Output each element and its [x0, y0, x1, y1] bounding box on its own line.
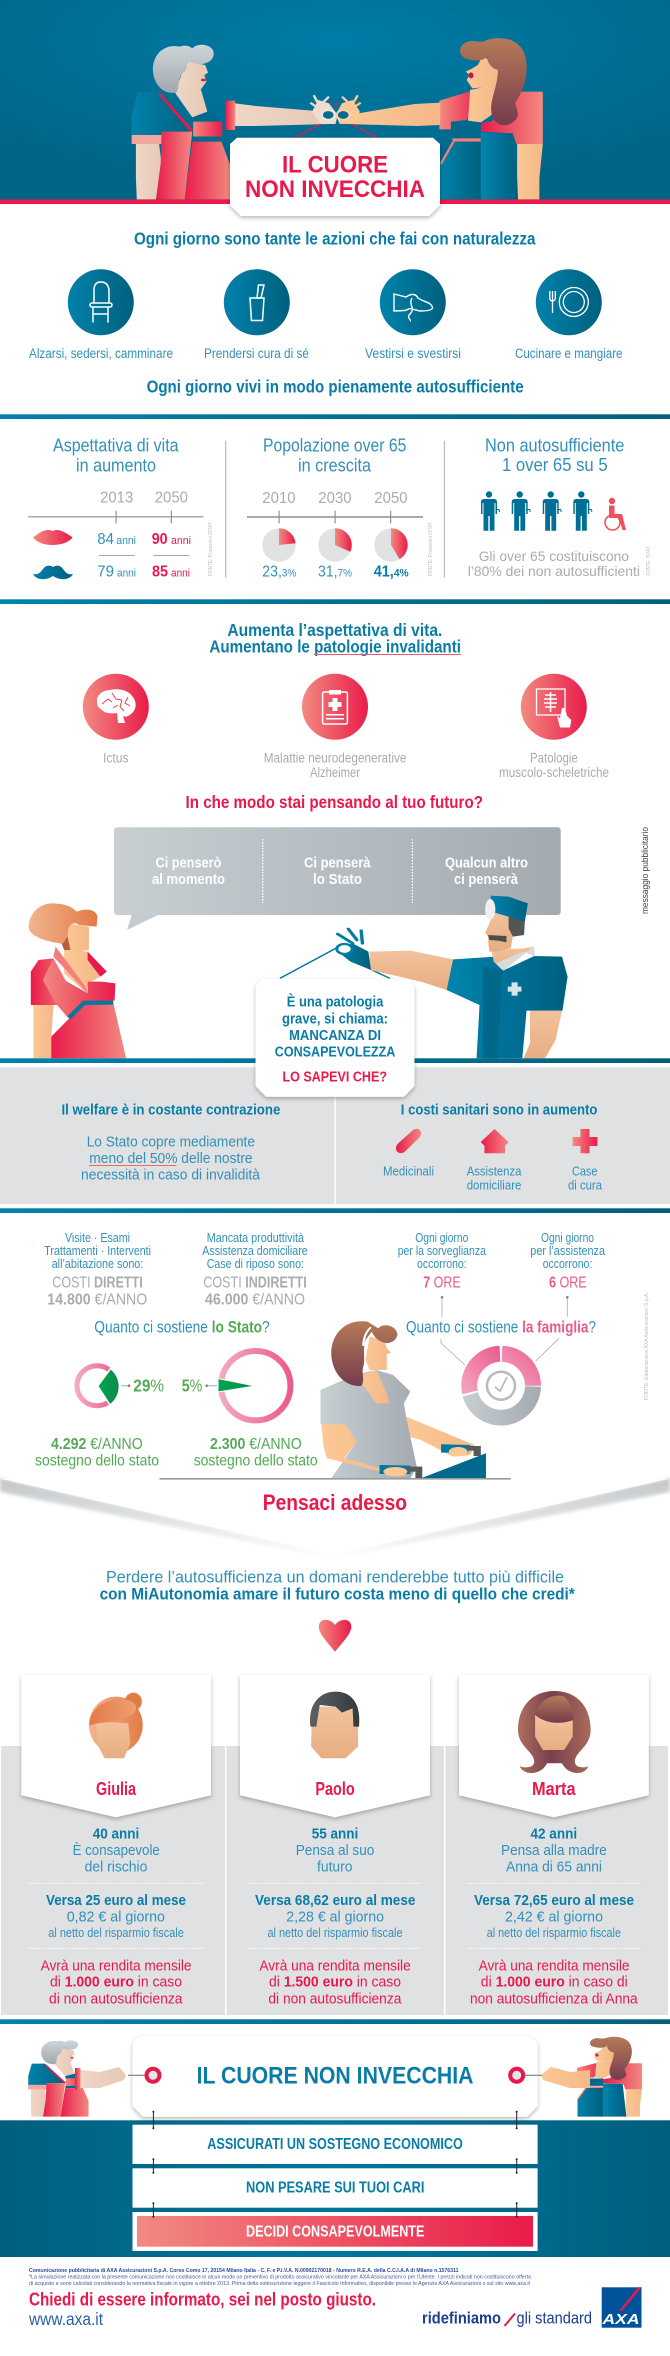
heading: how are you thinking about your future: In che modo stai pensando al tuo futuro?	[186, 792, 483, 812]
slogan	[422, 2308, 592, 2327]
disease labels: muscolo-scheletriche	[499, 765, 609, 780]
chart: state support 5 percent: 5%	[182, 1376, 202, 1396]
panel: Paolo: Versa 68,62 euro al mese	[255, 1892, 415, 1909]
panel: non self sufficient: l’80% dei non autosufficienti	[468, 563, 640, 579]
red line under hero	[0, 200, 670, 204]
hero illustration: two women tying a knot	[132, 38, 543, 199]
disease labels: Patologie	[530, 751, 578, 766]
disease labels: Alzheimer	[310, 765, 360, 780]
slogan: gli standard	[516, 2308, 592, 2327]
illustration: thinking woman	[29, 903, 126, 1058]
source note: FONTE: Elaborazione AXA Assicurazioni S.p.A.	[644, 1292, 650, 1400]
legal fine print: di acquisto e sono calcolati considerando la normativa fiscale in vigore a ottobre 2013. Prima della sottoscrizione leggere il Fascicolo Informativo, disponibile presso le Agenzie AXA Assicurazioni o sul sito www.axa.it	[29, 2281, 531, 2287]
icon: person 3	[543, 491, 562, 531]
arrow banner	[0, 1478, 670, 1554]
disease icons	[83, 674, 609, 780]
panel: hours of care: Ogni giorno	[541, 1231, 594, 1245]
website: www.axa.it	[28, 2309, 103, 2329]
pie chart 2010	[262, 528, 296, 562]
panel: Giulia: di 1.000 euro in caso	[50, 1974, 182, 1991]
card: lack of awareness: CONSAPEVOLEZZA	[275, 1045, 396, 1061]
message box: decide consciously: DECIDI CONSAPEVOLMENTE	[246, 2223, 424, 2240]
panel: non self sufficient	[468, 434, 652, 579]
icon: brain	[83, 674, 149, 740]
speech bubble: lo Stato	[313, 872, 362, 888]
panel: Marta: 2,42 € al giorno	[505, 1909, 603, 1926]
panel: Paolo: al netto del risparmio fiscale	[268, 1926, 403, 1940]
panel: rising health costs	[383, 1101, 603, 1192]
title card: IL CUORE	[282, 151, 388, 178]
illustration: nurse at work	[321, 1321, 486, 1478]
legal fine print: *La simulazione realizzata con la presente comunicazione non costituisce in alcun modo un preventivo di prodotto assicurativo vincolante per AXA Assicurazioni o per l’Utente. I prezzi indicati non costituiscono offerta	[29, 2275, 531, 2281]
panel: non self sufficient: Non autosufficiente	[485, 434, 624, 455]
panel: life expectancy: in aumento	[76, 454, 156, 475]
speech bubble: Qualcun altro	[445, 855, 528, 871]
hero: background	[0, 0, 670, 200]
panel: rising health costs: domiciliare	[467, 1177, 521, 1192]
title card	[230, 138, 440, 216]
gray column backgrounds	[1, 1746, 668, 2015]
heading: state support: Quanto ci sostiene lo Stato?	[94, 1319, 270, 1337]
panel: Paolo: Pensa al suo	[296, 1842, 374, 1859]
panel: Paolo	[240, 1675, 430, 2007]
panel: non self sufficient: 1 over 65 su 5	[502, 454, 608, 475]
panel: Giulia: Giulia	[96, 1778, 137, 1799]
panel: life expectancy: anni	[171, 535, 191, 547]
panel: non self sufficient: Gli over 65 costituiscono	[479, 548, 629, 564]
AXA logo	[601, 2287, 642, 2328]
panel: Marta: Versa 72,65 euro al mese	[474, 1892, 634, 1909]
panel: Giulia: È consapevole	[73, 1842, 160, 1859]
panel: life expectancy: 2050	[155, 490, 188, 507]
message box: decide consciously	[132, 2212, 538, 2251]
blue divider	[0, 2019, 670, 2024]
icon: chair	[68, 269, 134, 335]
panel: population over 65: in crescita	[298, 454, 372, 475]
heading: think about it now: Pensaci adesso	[263, 1490, 407, 1515]
panel: direct and indirect costs: COSTI INDIRETTI	[203, 1275, 307, 1292]
ring right	[510, 2069, 542, 2082]
icon: wheelchair	[605, 498, 626, 530]
blue divider	[0, 1208, 670, 1213]
message box: do not burden your loved ones: NON PESARE SUI TUOI CARI	[246, 2180, 424, 2197]
panel: Giulia: al netto del risparmio fiscale	[48, 1926, 184, 1940]
panel: Paolo: 55 anni	[312, 1825, 358, 1842]
panel: Giulia: Avrà una rendita mensile	[41, 1957, 191, 1974]
panel: welfare contraction: Lo Stato copre mediamente	[87, 1135, 255, 1151]
legal fine print: Comunicazione pubblicitaria di AXA Assicurazioni S.p.A. Corso Como 17, 20154 Milano Italia - C. F. e P.I.V.A. N.00902170018 - Numero R.E.A. della C.C.I.A.A di Milano n.1576311	[29, 2268, 458, 2274]
panel: rising health costs: di cura	[568, 1177, 603, 1192]
daily action icons row	[29, 269, 622, 361]
panel: population over 65: 23,3%	[262, 564, 296, 581]
older woman body	[132, 45, 231, 199]
AXA logo: AXA	[601, 2311, 640, 2328]
intro text: MiAutonomia	[100, 1569, 575, 1603]
panel: rising health costs: I costi sanitari sono in aumento	[401, 1101, 597, 1118]
panel: Giulia	[21, 1675, 211, 2007]
panel: Marta	[459, 1675, 649, 2007]
message box: economic support: ASSICURATI UN SOSTEGNO ECONOMICO	[207, 2136, 463, 2153]
heading: disabling diseases	[209, 620, 461, 656]
panel: direct and indirect costs: Trattamenti · Interventi	[44, 1244, 151, 1258]
panel: direct and indirect costs: Assistenza domiciliare	[202, 1244, 308, 1258]
panel: welfare contraction: Il welfare è in costante contrazione	[62, 1101, 280, 1118]
pie chart 2030	[318, 528, 352, 562]
panel: rising health costs: Assistenza	[467, 1163, 522, 1178]
panel: rising health costs: Case	[572, 1163, 597, 1178]
panel: life expectancy: anni	[117, 568, 136, 580]
speech bubble: al momento	[152, 872, 225, 888]
panel: Marta: di 1.000 euro in caso di	[481, 1974, 628, 1991]
intro text: MiAutonomia: Perdere l’autosufficienza un domani renderebbe tutto più difficile	[106, 1569, 564, 1587]
panel: population over 65: 31,7%	[318, 564, 352, 581]
closing title card	[128, 2036, 542, 2117]
closing title card: IL CUORE NON INVECCHIA	[197, 2063, 474, 2090]
panel: life expectancy: anni	[171, 568, 190, 580]
disease labels: Ictus	[103, 751, 129, 766]
panel: population over 65: FONTE: Proiezioni ISTAT	[428, 522, 434, 576]
panel: welfare contraction	[62, 1101, 280, 1183]
disease labels	[103, 751, 609, 780]
panel: population over 65: 2030	[318, 490, 352, 507]
panel: life expectancy: 2013	[100, 490, 133, 507]
blue floor line	[0, 1058, 670, 1063]
chart: state support 5 percent	[182, 1351, 290, 1420]
call to action: Chiedi di essere informato, sei nel posto giusto.	[29, 2290, 376, 2310]
card: lack of awareness: È una patologia	[287, 994, 384, 1011]
panel: hours of care: occorrono:	[417, 1257, 467, 1271]
title card: NON INVECCHIA	[245, 176, 425, 203]
panel: Giulia: 40 anni	[93, 1825, 139, 1842]
panel: Marta: al netto del risparmio fiscale	[487, 1926, 621, 1940]
panel: Paolo: 2,28 € al giorno	[286, 1909, 384, 1926]
panel: Marta: 42 anni	[530, 1825, 577, 1842]
chart: family care donut with clock	[461, 1346, 541, 1426]
closing illustration: older woman	[28, 2040, 126, 2117]
vertical label: messaggio pubblicitario	[640, 827, 651, 914]
icon: person 2	[512, 491, 531, 531]
younger woman outstretched arm	[346, 103, 440, 126]
table line	[159, 1478, 511, 1480]
connectors between boxes	[152, 2111, 518, 2218]
message box: do not burden your loved ones	[132, 2168, 538, 2208]
panel: Giulia: di non autosufficienza	[49, 1990, 183, 2007]
icon: house	[481, 1129, 508, 1153]
icon: person 4	[573, 491, 592, 531]
panel: direct and indirect costs: Visite · Esami	[65, 1231, 130, 1245]
panel: direct and indirect costs: Mancata produttività	[207, 1231, 304, 1245]
panel: Giulia: 0,82 € al giorno	[67, 1909, 165, 1926]
legal fine print	[29, 2268, 531, 2287]
panel: life expectancy: 84	[97, 531, 114, 548]
state support amounts: sostegno dello stato	[35, 1453, 159, 1470]
panel: life expectancy: FONTE: Proiezioni ISTAT	[208, 522, 214, 576]
panel: population over 65	[247, 435, 434, 581]
arrow banner shadow	[0, 1478, 670, 1559]
panel: hours of care: per la sorveglianza	[398, 1244, 486, 1258]
icon: clipboard	[302, 674, 368, 740]
icon: cross	[573, 1129, 597, 1153]
action labels: Alzarsi, sedersi, camminare	[29, 346, 173, 361]
chart: state support 29 percent: 29%	[133, 1376, 164, 1396]
icon: lips	[33, 530, 73, 545]
state support amounts: 4.292 €/ANNO	[51, 1436, 143, 1453]
panel: direct and indirect costs: all’abitazione sono:	[52, 1257, 143, 1271]
gray band	[0, 1067, 670, 1204]
teal band	[0, 2120, 670, 2257]
icon: shoe	[380, 269, 446, 335]
icon: clock	[487, 1372, 515, 1400]
heading: fully self sufficient: Ogni giorno vivi in modo pienamente autosufficiente	[147, 377, 524, 397]
panel: Marta: Avrà una rendita mensile	[479, 1957, 630, 1974]
panel: welfare contraction: meno del 50% delle nostre	[89, 1151, 253, 1167]
state support amounts: 2.300 €/ANNO	[210, 1436, 302, 1453]
panel: Marta: Anna di 65 anni	[506, 1859, 602, 1876]
chart: state support 29 percent	[77, 1366, 164, 1406]
panel: life expectancy: Aspettativa di vita	[53, 435, 179, 456]
panel: population over 65: 2050	[374, 490, 408, 507]
panel: life expectancy: 90	[152, 531, 168, 548]
panel: population over 65: Popolazione over 65	[263, 435, 406, 456]
panel: non self sufficient: FONTE: ISTAT	[646, 546, 652, 576]
heading: disabling diseases: Aumentano le patologie invalidanti	[209, 636, 461, 656]
action labels	[29, 346, 622, 361]
blue divider	[0, 414, 670, 419]
message box: economic support	[132, 2125, 538, 2164]
speech bubble	[114, 827, 561, 930]
panel: rising health costs: Medicinali	[383, 1163, 434, 1178]
state support amounts	[35, 1436, 318, 1470]
icon: heart	[319, 1620, 351, 1652]
panel: Marta: Pensa alla madre	[501, 1842, 607, 1859]
panel: Paolo: di 1.500 euro in caso	[269, 1974, 401, 1991]
closing illustration: younger woman	[541, 2037, 642, 2117]
heading: family support: Quanto ci sostiene la famiglia?	[406, 1319, 596, 1337]
card: lack of awareness	[256, 979, 414, 1097]
panel: life expectancy	[28, 435, 214, 581]
panel: population over 65: 2010	[262, 490, 296, 507]
panel: life expectancy: 79	[97, 564, 114, 581]
action labels: Cucinare e mangiare	[515, 346, 622, 361]
blue divider	[0, 599, 670, 604]
illustration: doctor	[280, 896, 568, 1058]
card: lack of awareness: MANCANZA DI	[289, 1028, 381, 1044]
panel: direct and indirect costs: Case di riposo sono:	[207, 1257, 304, 1271]
speech bubble: Ci penserà	[304, 855, 371, 871]
panel: Giulia: Versa 25 euro al mese	[46, 1892, 186, 1909]
face: Paolo	[310, 1692, 359, 1758]
speech bubble: Ci penserò	[156, 855, 222, 871]
panel: direct and indirect costs: 14.800 €/ANNO	[47, 1291, 147, 1308]
panel: Marta: non autosufficienza di Anna	[470, 1990, 638, 2007]
speech bubble: ci penserà	[454, 872, 519, 888]
panel: direct and indirect costs: 46.000 €/ANNO	[205, 1291, 305, 1308]
panel: direct and indirect costs: COSTI DIRETTI	[52, 1275, 143, 1292]
disease labels: Malattie neurodegenerative	[264, 751, 406, 766]
face: Giulia	[89, 1693, 143, 1758]
panel: hours of care	[398, 1231, 605, 1365]
state support amounts: sostegno dello stato	[194, 1453, 318, 1470]
panel: life expectancy: anni	[116, 535, 136, 547]
icon: x-ray	[521, 674, 587, 740]
action labels: Prendersi cura di sé	[204, 346, 309, 361]
panel: hours of care: per l’assistenza	[530, 1244, 605, 1258]
action labels: Vestirsi e svestirsi	[365, 346, 461, 361]
panel: hours of care: 7 ORE	[423, 1275, 461, 1292]
face: Marta	[518, 1691, 591, 1773]
intro text: MiAutonomia: con MiAutonomia amare il futuro costa meno di quello che credi*	[100, 1585, 575, 1603]
panel: Paolo: futuro	[317, 1859, 352, 1876]
panel: Paolo: di non autosufficienza	[268, 1990, 402, 2007]
panel: life expectancy: 85	[152, 564, 168, 581]
panel: Giulia: del rischio	[85, 1859, 147, 1876]
icon: toothbrush and cup	[224, 269, 290, 335]
panel: Paolo: Avrà una rendita mensile	[259, 1957, 411, 1974]
card: lack of awareness: LO SAPEVI CHE?	[282, 1070, 387, 1086]
icon: moustache	[33, 566, 73, 579]
icon: pill	[396, 1129, 421, 1153]
panel: population over 65: 41,4%	[374, 564, 409, 581]
ring left	[128, 2069, 160, 2082]
panel: Marta: Marta	[532, 1778, 576, 1799]
heading: everyday actions: Ogni giorno sono tante le azioni che fai con naturalezza	[134, 228, 536, 248]
slogan: ridefiniamo	[422, 2308, 501, 2327]
card: lack of awareness: grave, si chiama:	[282, 1011, 388, 1027]
panel: hours of care: Ogni giorno	[415, 1231, 468, 1245]
icon: hands and infinity knot	[294, 96, 377, 138]
panel: direct and indirect costs	[44, 1231, 308, 1308]
panel: hours of care: 6 ORE	[549, 1275, 587, 1292]
panel: hours of care: occorrono:	[543, 1257, 592, 1271]
heading: disabling diseases: Aumenta l’aspettativa di vita.	[227, 620, 442, 640]
younger woman body	[439, 38, 543, 199]
pie chart 2050	[374, 528, 408, 562]
panel: welfare contraction: necessità in caso di invalidità	[81, 1167, 261, 1183]
icon: person with cane	[481, 491, 500, 531]
panel: Paolo: Paolo	[315, 1778, 355, 1799]
older woman outstretched arm	[226, 101, 329, 130]
icon: plate and fork	[536, 269, 602, 335]
